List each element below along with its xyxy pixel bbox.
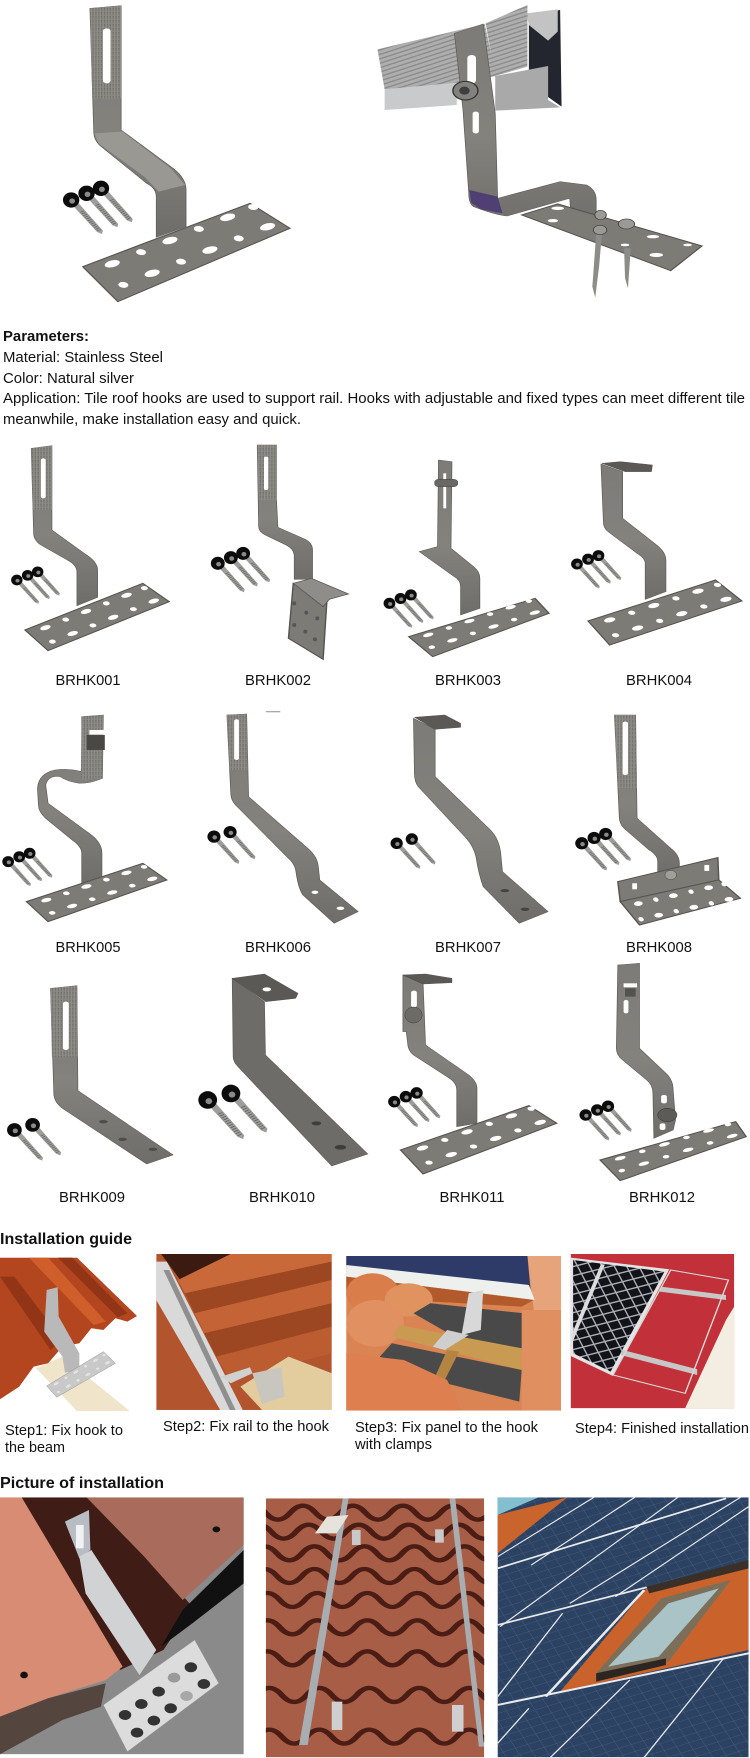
product BRHK002 (211, 445, 349, 659)
product labels: BRHK005 (56, 939, 120, 956)
parameters text block: Material: Stainless Steel (3, 349, 163, 366)
product BRHK012 (579, 963, 746, 1181)
heading: installation guide: Installation guide (0, 1231, 132, 1248)
photo: rails on tile roof (266, 1498, 484, 1758)
parameters text block: meanwhile, make installation easy and quick. (3, 411, 301, 428)
step captions: Step3: Fix panel to the hook (355, 1419, 538, 1436)
product labels: BRHK006 (245, 939, 311, 956)
heading: picture of installation: Picture of installation (0, 1475, 164, 1492)
product BRHK003 (384, 460, 549, 657)
parameters text block (3, 328, 745, 428)
product BRHK006 (207, 711, 358, 923)
product labels: BRHK012 (629, 1189, 695, 1206)
product labels (56, 672, 695, 1206)
product labels: BRHK010 (249, 1189, 315, 1206)
product labels: BRHK002 (245, 672, 311, 689)
hero section: product hooks (63, 5, 702, 302)
hook mounted on rail (377, 5, 702, 298)
step captions: with clamps (354, 1436, 432, 1453)
parameters text block: Application: Tile roof hooks are used to support rail. Hooks with adjustable and fixed types can meet different tile (3, 390, 745, 407)
photo: solar array on roof with skylight (498, 1497, 749, 1757)
product BRHK010 (198, 974, 368, 1166)
product BRHK001 (11, 446, 169, 651)
product labels: BRHK011 (440, 1189, 504, 1206)
product BRHK007 (391, 715, 548, 923)
step 3 image (346, 1256, 561, 1411)
product labels: BRHK007 (435, 939, 501, 956)
product labels: BRHK001 (56, 672, 120, 689)
step 4 image (571, 1254, 734, 1408)
step captions: the beam (5, 1439, 65, 1456)
installation photos (0, 1497, 749, 1757)
product BRHK004 (571, 462, 742, 645)
product BRHK005 (2, 715, 167, 922)
product BRHK009 (7, 986, 173, 1164)
product BRHK011 (388, 974, 557, 1174)
step captions: Step4: Finished installation (575, 1420, 749, 1437)
parameters text block: Parameters: (3, 328, 89, 345)
step captions: Step2: Fix rail to the hook (163, 1418, 329, 1435)
product grid rows 1 and 2 (2, 445, 742, 925)
product labels: BRHK004 (626, 672, 692, 689)
step captions: Step1: Fix hook to (5, 1422, 123, 1439)
step 1 image (0, 1258, 137, 1411)
product grid row 3 and installation steps (0, 963, 746, 1411)
step 2 image (156, 1254, 332, 1410)
hook with plate and screws (63, 6, 290, 302)
product BRHK008 (575, 715, 740, 925)
step captions (5, 1418, 749, 1456)
product labels: BRHK003 (435, 672, 501, 689)
product labels: BRHK009 (59, 1189, 125, 1206)
parameters text block: Color: Natural silver (3, 370, 134, 387)
product labels: BRHK008 (626, 939, 692, 956)
photo: hook on tile close-up (0, 1497, 244, 1754)
